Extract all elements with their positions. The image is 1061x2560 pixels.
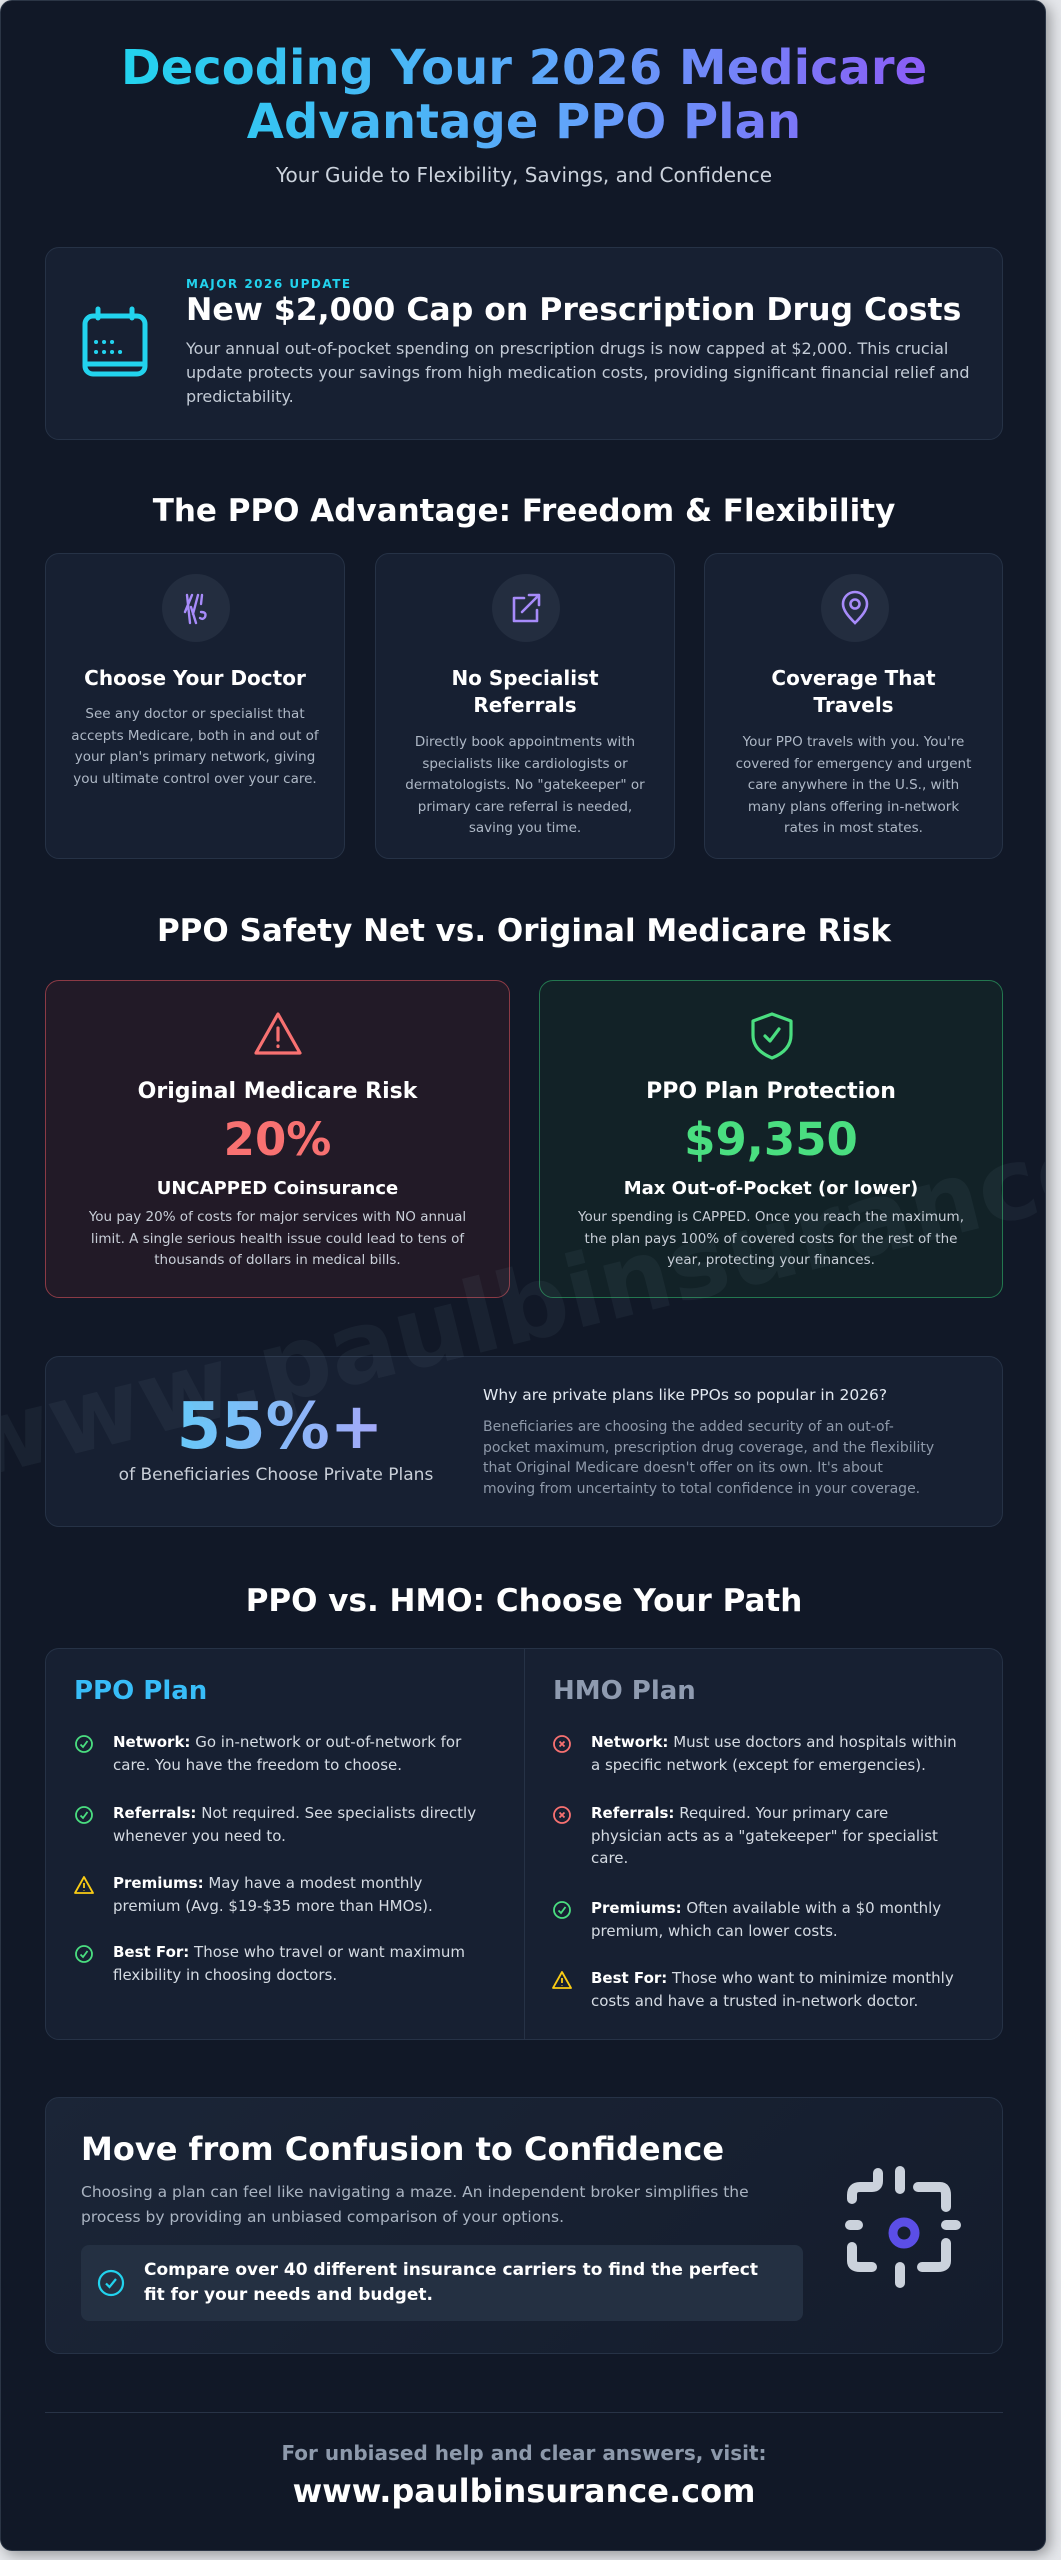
stat: 20% (224, 1113, 331, 1166)
body: Your annual out-of-pocket spending on prescription drugs is now capped at $2,000. This crucial update protects your savings from high medication costs, providing significant financial relief and predictability. (186, 339, 970, 406)
icon: external link (492, 574, 560, 642)
panel: coverage travels (704, 553, 1003, 859)
subtitle: UNCAPPED Coinsurance (157, 1178, 398, 1199)
heading: ppo vs hmo: PPO vs. HMO: Choose Your Path (246, 1583, 802, 1619)
panel: stats (45, 1356, 1003, 1527)
body: Your spending is CAPPED. Once you reach the maximum, the plan pays 100% of covered costs for the rest of the year, protecting your finances. (578, 1209, 964, 1268)
stat label: of Beneficiaries Choose Private Plans (119, 1465, 433, 1485)
divider (45, 2412, 1003, 2413)
footer text: For unbiased help and clear answers, visit: (281, 2441, 767, 2465)
icon: warning (254, 1012, 302, 1055)
column title: HMO Plan (553, 1676, 696, 1706)
card body: See any doctor or specialist that accepts Medicare, both in and out of your plan's primary network, giving you ultimate control over your care. (71, 706, 319, 786)
subtitle: Max Out-of-Pocket (or lower) (624, 1178, 918, 1199)
item: best for: Best For: Those who travel or want maximum flexibility in choosing doctors. (113, 1943, 465, 1984)
callout: carriers: Compare over 40 different insurance carriers to find the perfect fit for your needs and budget. (144, 2260, 758, 2305)
item: best for: Best For: Those who want to minimize monthly costs and have a trusted in-network doctor. (591, 1969, 954, 2010)
item: referrals: Referrals: Not required. See specialists directly whenever you need to. (113, 1804, 476, 1844)
cta heading: Move from Confusion to Confidence (81, 2130, 724, 2168)
card title (771, 666, 936, 717)
panel: choose your doctor (45, 553, 345, 859)
panel: comparison (45, 1648, 1003, 2040)
icon: focus target (845, 2166, 961, 2288)
panel: call to action (45, 2097, 1003, 2354)
item: premiums: Premiums: May have a modest monthly premium (Avg. $19-$35 more than HMOs). (113, 1874, 433, 1914)
column: HMO (552, 1676, 957, 2010)
title: PPO Plan Protection (646, 1079, 896, 1104)
heading: PPO advantage: The PPO Advantage: Freedom & Flexibility (153, 493, 895, 529)
footer url: www.paulbinsurance.com (293, 2472, 755, 2510)
label: MAJOR 2026 UPDATE (186, 277, 352, 291)
card title: Choose Your Doctor (84, 666, 306, 690)
item: premiums: Premiums: Often available with a $0 monthly premium, which can lower costs. (591, 1899, 941, 1940)
panel: update card (45, 247, 1003, 440)
item: network: Network: Go in-network or out-of-network for care. You have the freedom to choose. (113, 1733, 461, 1774)
item: network: Network: Must use doctors and hospitals within a specific network (except for emergencies). (591, 1733, 957, 1774)
card title: Travels (813, 693, 894, 717)
column title: PPO Plan (74, 1676, 207, 1706)
card title: Coverage That (771, 666, 936, 690)
icon: shield (751, 1012, 793, 1060)
card title: No Specialist (451, 666, 599, 690)
heading: New $2,000 Cap on Prescription Drug Costs (186, 292, 961, 328)
card body: Your PPO travels with you. You're covered for emergency and urgent care anywhere in the U.S., with many plans offering in-network rates in most states. (736, 734, 971, 836)
item: referrals: physician acts as a "gatekeeper" for specialist care. (591, 1826, 938, 1867)
title (121, 40, 927, 150)
explanation: Beneficiaries are choosing the added security of an out-of-pocket maximum, prescription drug coverage, and the flexibility that Original Medicare doesn't offer on its own. It's about moving from uncertainty to total confidence in your coverage. (483, 1419, 934, 1497)
title: Advantage PPO Plan (247, 94, 801, 150)
question: Why are private plans like PPOs so popular in 2026? (483, 1386, 887, 1404)
icon: doctor (162, 574, 230, 642)
big stat: 55%+ (177, 1390, 383, 1464)
callout: carriers (81, 2245, 803, 2321)
icon: calendar (82, 306, 148, 376)
icon: map pin (821, 574, 889, 642)
subtitle: Your Guide to Flexibility, Savings, and Confidence (276, 163, 772, 187)
column: PPO (74, 1676, 476, 1984)
heading: safety net: PPO Safety Net vs. Original Medicare Risk (157, 913, 891, 949)
card title: Referrals (473, 693, 577, 717)
title: Decoding Your 2026 Medicare (121, 40, 927, 96)
panel: original medicare risk (45, 980, 510, 1298)
card title (451, 666, 599, 717)
card body: Directly book appointments with specialists like cardiologists or dermatologists. No "gatekeeper" or primary care referral is needed, saving you time. (405, 734, 645, 836)
item: referrals: Referrals: Required. Your primary care (591, 1804, 888, 1822)
stat: $9,350 (684, 1113, 858, 1166)
item: referrals (553, 1804, 938, 1867)
cta body: Choosing a plan can feel like navigating a maze. An independent broker simplifies the process by providing an unbiased comparison of your options. (81, 2183, 749, 2226)
panel: ppo protection (539, 980, 1003, 1298)
panel: no referrals (375, 553, 675, 859)
title: Original Medicare Risk (138, 1079, 417, 1104)
body: You pay 20% of costs for major services with NO annual limit. A single serious health issue could lead to tens of thousands of dollars in medical bills. (89, 1209, 466, 1268)
